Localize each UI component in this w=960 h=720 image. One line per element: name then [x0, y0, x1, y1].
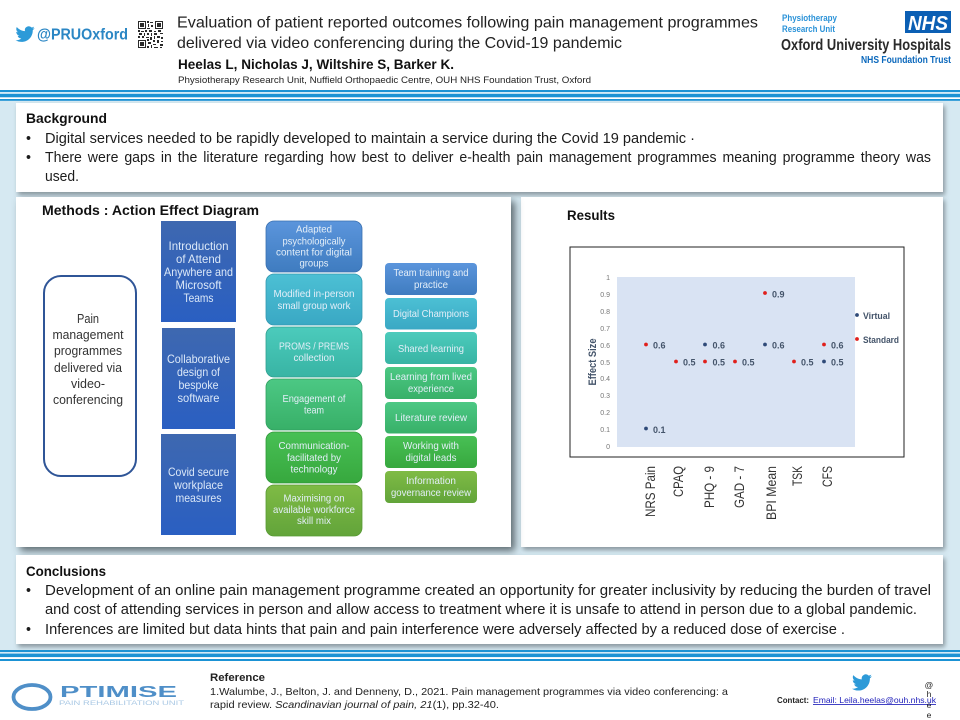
wrapped handle: e — [927, 710, 932, 720]
driver: engagement: team — [304, 404, 324, 416]
data labels: 0.5 — [683, 358, 696, 368]
y axis labels: 1 — [606, 275, 610, 282]
icon: twitter bird — [852, 674, 872, 691]
outcome box: video- — [71, 376, 105, 391]
idea: digital leads — [385, 436, 477, 468]
idea: information governance: Information — [406, 475, 456, 487]
y axis labels: 0.1 — [600, 427, 610, 434]
data labels: 0.5 — [712, 358, 725, 368]
panel: results — [521, 197, 943, 547]
heading: results: Results — [567, 208, 615, 223]
primary driver: covid measures: measures — [176, 491, 222, 505]
primary driver: bespoke software: design of — [177, 365, 221, 379]
driver: adapted content: content for digital — [276, 246, 352, 258]
logo: OUH NHS — [781, 11, 952, 66]
reference: rapid review. Scandinavian journal of pain, 21 (1), pp.32-40. — [210, 699, 499, 711]
idea: lived experience: experience — [408, 383, 454, 395]
contact — [777, 674, 937, 720]
outcome box: Pain — [77, 311, 99, 326]
contact label: Contact: — [777, 696, 809, 705]
primary driver: software platforms: Introduction — [168, 239, 228, 253]
QR code — [138, 21, 163, 48]
primary driver: bespoke software: software — [178, 391, 220, 405]
y axis labels: 0.8 — [600, 309, 610, 316]
conclusion 1: • — [26, 583, 31, 599]
panel: conclusions: and cost of attending services in person and allow access to treatment where it is unsafe to attend in person due to a global pandemic. — [45, 602, 917, 618]
y axis labels — [600, 275, 610, 451]
driver: workforce skill mix: Maximising on — [284, 492, 345, 504]
data labels: 0.5 — [742, 358, 755, 368]
wrapped handle: @ — [925, 680, 933, 690]
idea: digital leads: digital leads — [406, 452, 456, 464]
driver: engagement: Engagement of — [282, 393, 346, 405]
driver: PROMS: PROMS / PREMS — [279, 340, 349, 352]
driver: engagement — [266, 379, 362, 430]
unit name: Physiotherapy — [782, 13, 838, 24]
data labels: 0.5 — [831, 358, 844, 368]
category labels: NRS Pain — [642, 466, 658, 517]
panel: conclusions: Development of an online pain management programme created an opportunity for greater inclusivity by reducing the burden of travel — [45, 583, 931, 599]
secondary drivers stack — [266, 221, 362, 536]
wrapped handle: e — [927, 700, 932, 710]
heading: background: Background — [26, 110, 107, 126]
idea: lived experience: Learning from lived — [390, 371, 472, 383]
y axis title: Effect Size — [587, 338, 599, 386]
idea: shared learning — [385, 332, 477, 364]
y axis labels: 0.9 — [600, 292, 610, 299]
idea: team training — [385, 263, 477, 295]
category labels: BPI Mean — [763, 466, 779, 520]
category labels: CPAQ — [670, 466, 686, 497]
legend: Virtual — [863, 311, 890, 321]
driver: small group work — [266, 274, 362, 325]
primary driver: covid measures: workplace — [173, 478, 223, 492]
reference — [210, 672, 728, 711]
primary driver: bespoke software — [162, 328, 235, 429]
contact email: Email: Leila.heelas@ouh.nhs.uk — [813, 695, 937, 705]
bullet 1: • — [26, 131, 31, 147]
panel: methods — [16, 197, 511, 547]
data labels: 0.6 — [712, 340, 725, 350]
driver: workforce skill mix — [266, 485, 362, 536]
wrapped handle — [925, 680, 933, 720]
panel: background: There were gaps in the literature regarding how best to deliver e-health pain management programmes meaning programme theory was — [45, 150, 931, 166]
bullet 2: • — [26, 150, 31, 166]
footer rule lines — [0, 650, 960, 661]
data labels: 0.5 — [801, 358, 814, 368]
driver: communication: technology — [290, 464, 338, 476]
icon: twitter bird — [16, 26, 35, 42]
citation: 1.Walumbe, J., Belton, J. and Denneny, D., 2021. Pain management programmes via video conferencing: a — [210, 686, 728, 698]
idea: lived experience — [385, 367, 477, 399]
panel: background: Digital services needed to be rapidly developed to maintain a service during the Covid 19 pandemic · — [45, 131, 695, 147]
legend — [855, 311, 899, 345]
outcome box — [44, 276, 136, 476]
header rule lines — [0, 90, 960, 101]
panel: background: used. — [45, 169, 79, 185]
y axis labels: 0.4 — [600, 376, 610, 383]
authors: Heelas L, Nicholas J, Wiltshire S, Barker K. — [178, 57, 454, 72]
primary driver: bespoke software: bespoke — [178, 378, 219, 392]
outcome box: conferencing — [53, 392, 123, 407]
idea: team training: Team training and — [394, 267, 469, 279]
driver: workforce skill mix: available workforce — [273, 504, 355, 516]
outcome box: programmes — [54, 343, 122, 358]
driver: adapted content — [266, 221, 362, 272]
primary driver: bespoke software: Collaborative — [167, 352, 230, 366]
scatter chart — [570, 247, 904, 520]
category labels: CFS — [819, 466, 835, 487]
primary driver: software platforms: Microsoft — [176, 278, 222, 292]
standard series — [644, 291, 826, 363]
heading: methods: Methods : Action Effect Diagram — [42, 202, 259, 218]
y axis labels: 0 — [606, 444, 610, 451]
title line 2: delivered via video conferencing during the Covid-19 pandemic — [177, 35, 622, 52]
affiliation: Physiotherapy Research Unit, Nuffield Orthopaedic Centre, OUH NHS Foundation Trust, Oxford — [178, 75, 591, 86]
change ideas stack — [385, 263, 477, 503]
reference heading: Reference — [210, 672, 265, 684]
category labels: GAD - 7 — [731, 466, 747, 508]
driver: communication: facilitated by — [287, 452, 342, 464]
driver: adapted content: psychologically — [282, 236, 346, 248]
category labels: PHQ - 9 — [701, 466, 717, 508]
driver: communication — [266, 432, 362, 483]
data labels: 0.6 — [772, 340, 785, 350]
primary driver: software platforms — [161, 221, 236, 322]
handle text: @PRUOxford — [37, 26, 128, 44]
idea: digital champions — [385, 298, 477, 330]
primary driver: covid measures — [161, 434, 236, 535]
y axis labels: 0.6 — [600, 343, 610, 350]
category labels: TSK — [789, 466, 805, 486]
y axis labels: 0.3 — [600, 393, 610, 400]
primary driver: software platforms: Teams — [184, 291, 214, 305]
y axis labels: 0.2 — [600, 410, 610, 417]
logo tagline: PAIN REHABILITATION UNIT — [59, 701, 185, 707]
title line 1: Evaluation of patient reported outcomes following pain management programmes — [177, 14, 758, 32]
panel: conclusions — [16, 555, 943, 644]
driver: PROMS — [266, 327, 362, 377]
heading: conclusions: Conclusions — [26, 563, 106, 579]
data labels: 0.9 — [772, 290, 785, 300]
idea: literature review — [385, 402, 477, 434]
driver: communication: Communication- — [278, 440, 350, 452]
idea: information governance: governance review — [391, 487, 471, 499]
panel: conclusions: Inferences are limited but data hints that pain and pain interference were adversely affected by a reduced dose of exercise . — [45, 622, 845, 638]
driver: PROMS: collection — [294, 352, 335, 364]
logo: OUH NHS: NHS — [908, 13, 949, 35]
driver: adapted content: groups — [300, 258, 328, 270]
outcome box: management — [52, 327, 124, 342]
virtual series — [644, 343, 826, 430]
driver: workforce skill mix: skill mix — [297, 515, 332, 527]
conclusion 2: • — [26, 622, 31, 638]
driver: adapted content: Adapted — [296, 224, 332, 236]
idea: shared learning: Shared learning — [398, 343, 464, 355]
idea: digital champions: Digital Champions — [393, 308, 469, 320]
idea: team training: practice — [414, 279, 448, 291]
y axis labels: 0.7 — [600, 326, 610, 333]
primary driver: software platforms: Anywhere and — [164, 265, 233, 279]
data labels: 0.6 — [831, 340, 844, 350]
logo: OUH NHS: Research Unit — [782, 24, 836, 35]
driver: small group work: Modified in-person — [274, 288, 355, 300]
primary driver: covid measures: Covid secure — [168, 465, 229, 479]
title — [177, 14, 758, 86]
data labels — [653, 290, 844, 435]
primary driver: software platforms: of Attend — [176, 252, 221, 266]
logo: optimise — [14, 684, 185, 709]
y axis labels: 0.5 — [600, 360, 610, 367]
idea: literature review: Literature review — [395, 412, 467, 424]
logo ring — [14, 685, 50, 709]
NHS badge — [905, 11, 951, 33]
data labels: 0.6 — [653, 340, 666, 350]
data labels: 0.1 — [653, 425, 666, 435]
driver: small group work: small group work — [278, 300, 351, 312]
category labels — [642, 466, 835, 520]
idea: information governance — [385, 471, 477, 503]
legend: Standard — [863, 335, 899, 345]
outcome box: delivered via — [54, 360, 123, 375]
idea: digital leads: Working with — [403, 440, 459, 452]
twitter handle — [16, 26, 128, 44]
wrapped handle: h — [927, 689, 932, 699]
panel: background — [16, 103, 943, 192]
logo wordmark: PTIMISE — [60, 684, 178, 701]
